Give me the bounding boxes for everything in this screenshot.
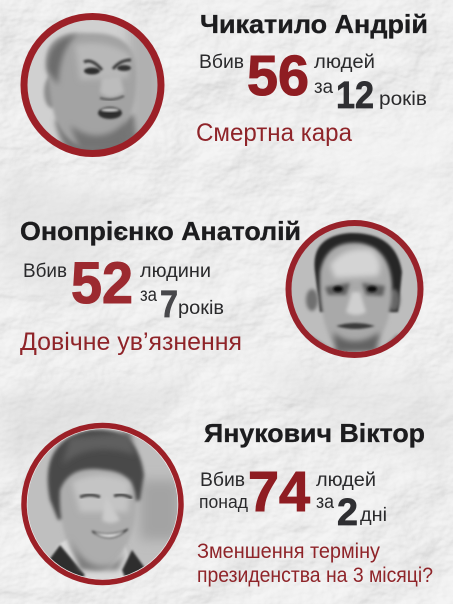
stat: Вбив 56 людей за 12 років: за <box>314 77 333 98</box>
portrait: Онопрієнко <box>285 220 425 365</box>
panel: Чикатило Андрій <box>20 9 428 165</box>
stat: Вбив понад 74 людей за 2 дні: 74 <box>248 460 310 524</box>
stat: Вбив 52 людини за 7 років: за <box>140 285 157 306</box>
portrait: Янукович <box>20 425 185 590</box>
stat: Вбив 56 людей за 12 років: людей <box>314 52 375 73</box>
stat: Вбив 52 людини за 7 років: 7 <box>160 284 178 326</box>
name: Онопрієнко Анатолій <box>20 216 301 246</box>
stat: Вбив 52 людини за 7 років: років <box>178 298 224 319</box>
stat: Вбив понад 74 людей за 2 дні: людей <box>316 470 376 491</box>
sentence: Зменшення терміну <box>197 540 380 563</box>
stat: Вбив 56 людей за 12 років: років <box>379 89 427 110</box>
stat: Вбив 56 людей за 12 років: Вбив <box>199 52 244 73</box>
stat: Вбив 52 людини за 7 років: Вбив <box>23 261 67 282</box>
sentence: Смертна кара <box>196 119 352 147</box>
name: Янукович Віктор <box>204 418 425 448</box>
stat: Вбив понад 74 людей за 2 дні: дні <box>360 505 387 526</box>
stat: Вбив понад 74 людей за 2 дні <box>199 460 387 534</box>
sentence: президенства на 3 місяці? <box>197 564 433 587</box>
stat: Вбив 56 людей за 12 років: 12 <box>336 75 374 117</box>
stat: Вбив понад 74 людей за 2 дні: понад <box>199 492 248 512</box>
stat: Вбив 56 людей за 12 років: 56 <box>247 44 309 108</box>
stat: Вбив 56 людей за 12 років <box>199 44 427 117</box>
panel: Янукович Віктор <box>20 418 433 590</box>
panel: Онопрієнко Анатолій <box>20 216 425 365</box>
sentence: Довічне ув’язнення <box>20 328 242 356</box>
portrait: Чикатило <box>20 15 165 165</box>
stat: Вбив понад 74 людей за 2 дні: 2 <box>337 492 358 534</box>
name: Чикатило Андрій <box>200 9 428 39</box>
sentence <box>197 540 433 587</box>
stat: Вбив 52 людини за 7 років <box>23 251 224 326</box>
stat: Вбив 52 людини за 7 років: людини <box>140 261 211 282</box>
stat: Вбив 52 людини за 7 років: 52 <box>71 251 133 316</box>
stat: Вбив понад 74 людей за 2 дні: за <box>316 492 334 513</box>
stat: Вбив понад 74 людей за 2 дні: Вбив <box>200 470 245 491</box>
